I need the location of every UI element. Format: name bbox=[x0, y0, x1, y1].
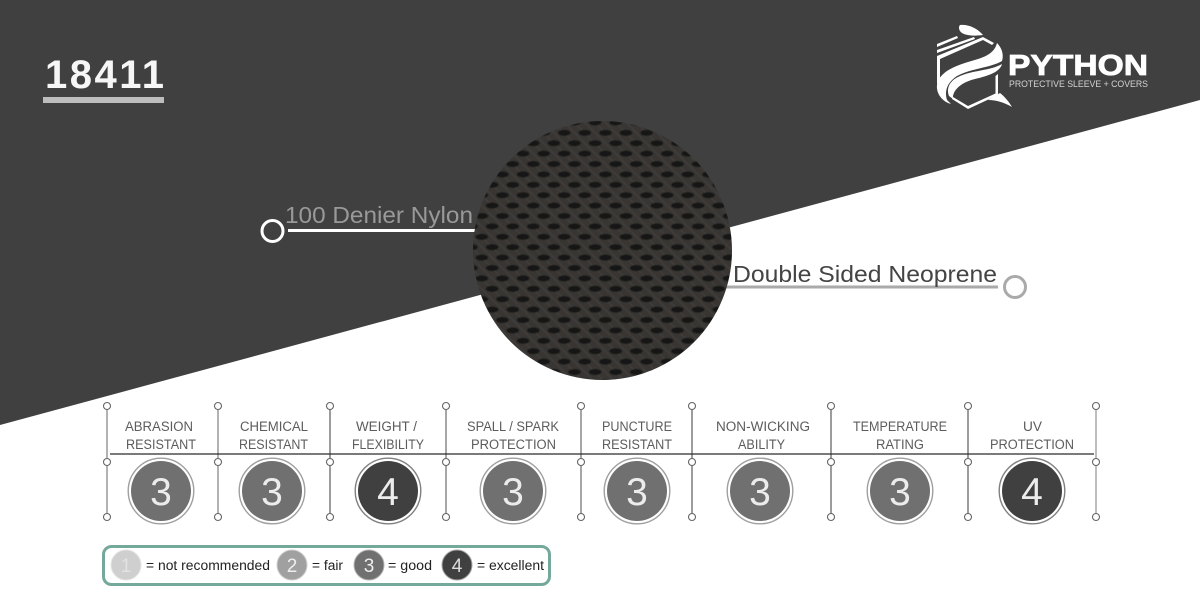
callout: 100 Denier Nylon bbox=[262, 202, 475, 242]
callout: Double Sided Neoprene bbox=[726, 261, 1026, 298]
rating: non-wicking ability 3 bbox=[716, 419, 810, 524]
rating: temperature rating 3: TEMPERATURE bbox=[853, 419, 947, 434]
legend item: 4 excellent bbox=[442, 550, 544, 580]
legend item: 1 not recommended: 1 bbox=[121, 556, 131, 577]
logo wordmark: PYTHON bbox=[1008, 50, 1148, 82]
rating: puncture resistant 3 bbox=[602, 419, 672, 524]
rating: chemical resistant 3: RESISTANT bbox=[239, 437, 308, 452]
rating: weight / flexibility 4 bbox=[352, 419, 424, 524]
legend item: 3 good bbox=[354, 550, 432, 580]
callout: 100 Denier Nylon: 100 Denier Nylon bbox=[285, 202, 473, 228]
rating: chemical resistant 3 bbox=[239, 419, 308, 524]
rating: weight / flexibility 4: FLEXIBILITY bbox=[352, 437, 424, 452]
legend item: 4 excellent: 4 bbox=[452, 556, 463, 577]
legend item: 1 not recommended bbox=[111, 550, 270, 580]
rating: puncture resistant 3: PUNCTURE bbox=[602, 419, 672, 434]
rating: non-wicking ability 3: ABILITY bbox=[738, 437, 785, 452]
rating: chemical resistant 3: 3 bbox=[261, 471, 283, 514]
logo tagline: PROTECTIVE SLEEVE + COVERS bbox=[1009, 79, 1148, 90]
rating: spall / spark protection 3: SPALL / SPARK bbox=[467, 419, 559, 434]
icon: snake wrapped shield bbox=[937, 25, 1012, 109]
rating: temperature rating 3: 3 bbox=[889, 471, 911, 514]
legend item: 1 not recommended: = not recommended bbox=[146, 558, 270, 573]
fabric swatch circle bbox=[473, 121, 732, 380]
diagonal dark background bbox=[0, 0, 1200, 425]
rating: puncture resistant 3: RESISTANT bbox=[602, 437, 672, 452]
rating: spall / spark protection 3 bbox=[467, 419, 559, 524]
rating: spall / spark protection 3: 3 bbox=[502, 471, 524, 514]
legend bbox=[104, 546, 550, 584]
legend item: 2 fair: 2 bbox=[287, 556, 297, 577]
rating: temperature rating 3 bbox=[853, 419, 947, 524]
legend item: 3 good: 3 bbox=[364, 556, 374, 577]
rating: UV protection 4 bbox=[990, 419, 1074, 524]
ratings table bbox=[104, 402, 1100, 524]
rating: non-wicking ability 3: 3 bbox=[749, 471, 771, 514]
legend item: 3 good: = good bbox=[388, 558, 432, 573]
rating: weight / flexibility 4: WEIGHT / bbox=[356, 419, 417, 434]
column separators bbox=[104, 402, 1100, 520]
legend item: 2 fair bbox=[277, 550, 344, 580]
rating: abrasion resistant 3: ABRASION bbox=[125, 419, 193, 434]
rating: non-wicking ability 3: NON-WICKING bbox=[716, 419, 810, 434]
legend item: 2 fair: = fair bbox=[312, 558, 344, 573]
rating: abrasion resistant 3: RESISTANT bbox=[126, 437, 196, 452]
callout: Double Sided Neoprene: Double Sided Neoprene bbox=[733, 261, 997, 287]
logo: Python protective sleeve + covers bbox=[937, 25, 1148, 109]
legend item: 4 excellent: = excellent bbox=[477, 558, 544, 573]
rating: abrasion resistant 3: 3 bbox=[150, 471, 172, 514]
rating: UV protection 4: 4 bbox=[1021, 471, 1043, 514]
rating: abrasion resistant 3 bbox=[125, 419, 196, 524]
rating: temperature rating 3: RATING bbox=[876, 437, 924, 452]
rating: UV protection 4: UV bbox=[1023, 419, 1042, 434]
product code heading: 18411 bbox=[45, 53, 164, 97]
rating: spall / spark protection 3: PROTECTION bbox=[471, 437, 556, 452]
rating: chemical resistant 3: CHEMICAL bbox=[240, 419, 308, 434]
rating: puncture resistant 3: 3 bbox=[626, 471, 648, 514]
rating: UV protection 4: PROTECTION bbox=[990, 437, 1074, 452]
rating: weight / flexibility 4: 4 bbox=[377, 471, 399, 514]
